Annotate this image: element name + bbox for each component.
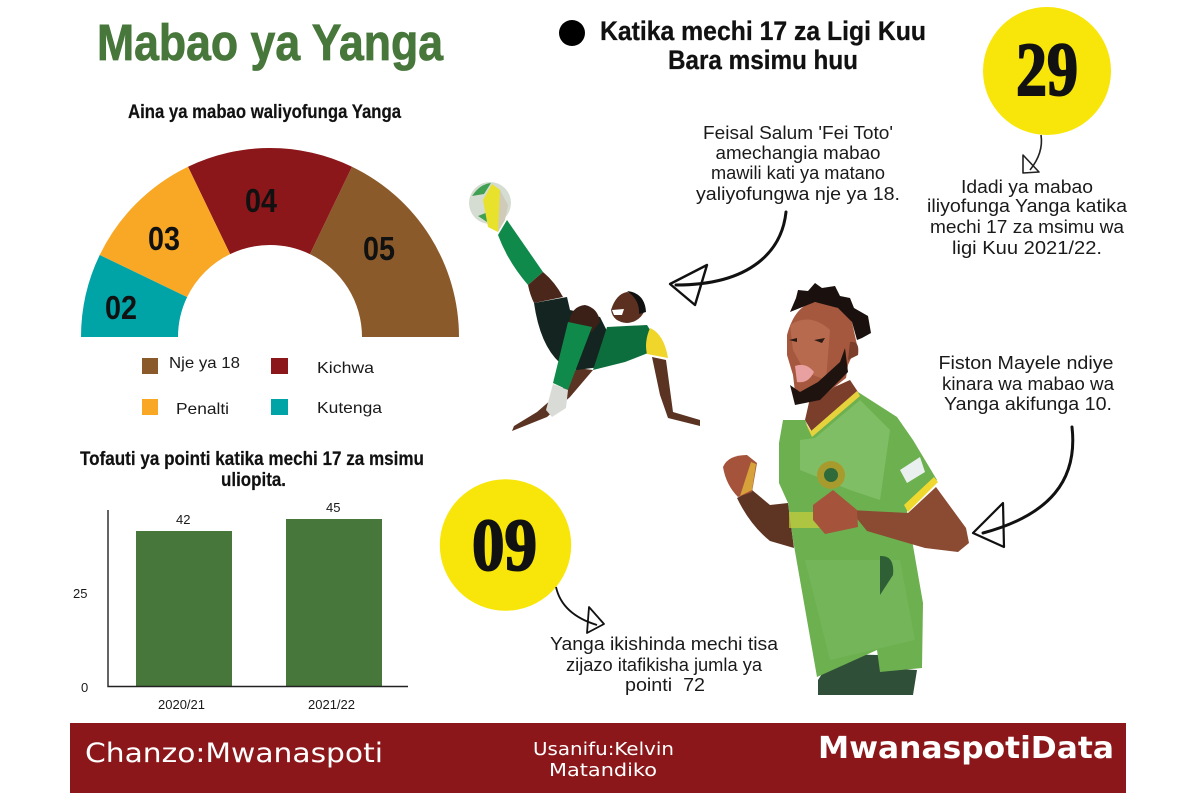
segment: Penalti (03) xyxy=(100,167,230,297)
text: Fei Toto caption xyxy=(696,122,900,204)
left arm xyxy=(737,490,794,548)
footer: designer: Matandiko xyxy=(549,760,657,781)
right fist xyxy=(813,490,858,534)
head xyxy=(611,292,645,323)
footer: source: Chanzo:Mwanaspoti xyxy=(85,738,383,769)
legend xyxy=(142,355,382,418)
text: 09 caption: pointi 72 xyxy=(625,674,705,695)
head xyxy=(787,302,857,400)
bar chart: 2020/21 xyxy=(158,697,205,712)
text: Fei Toto caption: yaliyofungwa nje ya 18. xyxy=(696,183,900,204)
headline with bullet xyxy=(559,16,926,75)
bar chart heading: Tofauti ya pointi katika mechi 17 za msimu xyxy=(80,449,424,470)
stat circle: 29 xyxy=(983,7,1111,135)
text: Fei Toto caption: amechangia mabao xyxy=(716,142,880,163)
footer: designer: Usanifu:Kelvin xyxy=(533,739,674,760)
text: 29 caption: ligi Kuu 2021/22. xyxy=(952,237,1102,258)
title: Mabao ya Yanga xyxy=(97,14,444,71)
hair xyxy=(790,283,871,340)
text: Fei Toto caption: mawili kati ya matano xyxy=(711,162,885,183)
jersey collar xyxy=(805,391,860,437)
sponsor text mark xyxy=(789,512,825,528)
jersey xyxy=(593,325,667,370)
lower arm left xyxy=(512,368,593,431)
semi-donut chart: 05 xyxy=(363,230,395,267)
bar chart: 25 xyxy=(73,586,87,601)
yellow sleeve xyxy=(646,328,668,358)
text: Mayele caption: kinara wa mabao wa xyxy=(942,373,1115,394)
bar chart: 42 xyxy=(176,512,190,527)
footer: brand: MwanaspotiData xyxy=(818,731,1114,766)
pie chart heading: Aina ya mabao waliyofunga Yanga xyxy=(128,102,401,123)
arrow: from 29 to caption xyxy=(1023,135,1041,173)
footer: designer xyxy=(533,739,674,781)
stat circle: 29: 29 xyxy=(1016,28,1078,112)
text: 29 caption: iliyofunga Yanga katika xyxy=(927,195,1128,216)
text: 29 caption: Idadi ya mabao xyxy=(961,176,1093,197)
bar chart: 2021/22 xyxy=(308,697,355,712)
headline with bullet: Bara msimu huu xyxy=(668,45,858,75)
bar chart: 0 xyxy=(81,680,88,695)
headline with bullet: Katika mechi 17 za Ligi Kuu xyxy=(600,16,926,46)
shorts xyxy=(534,297,613,370)
boot low xyxy=(546,384,568,417)
arrow: from 09 to caption xyxy=(556,587,604,633)
arrow: to Mayele xyxy=(973,427,1073,547)
bar chart xyxy=(73,500,408,712)
stat circle: 09: 09 xyxy=(472,505,537,587)
badge xyxy=(817,461,845,489)
mouth xyxy=(795,365,814,382)
bar chart: 45 xyxy=(326,500,340,515)
text: 09 caption: Yanga ikishinda mechi tisa xyxy=(550,633,779,654)
text: 29 caption: mechi 17 za msimu wa xyxy=(930,216,1125,237)
right arm xyxy=(652,357,700,426)
segment: Nje ya 18 (05) xyxy=(310,167,459,337)
knee and thigh xyxy=(569,305,600,332)
left fist xyxy=(723,455,757,497)
text: Mayele caption xyxy=(938,352,1115,414)
semi-donut chart: 03 xyxy=(148,220,180,257)
text: 09 caption: zijazo itafikisha jumla ya xyxy=(566,654,763,675)
ball xyxy=(469,182,511,224)
stat circle: 09 xyxy=(440,479,571,611)
text: Mayele caption: Fiston Mayele ndiye xyxy=(938,352,1114,373)
sleeve patch xyxy=(900,457,925,483)
bar chart heading xyxy=(80,449,424,491)
legend: Penalti xyxy=(176,401,229,418)
text: Mayele caption: Yanga akifunga 10. xyxy=(944,393,1112,414)
legend: Kichwa xyxy=(317,360,374,377)
jersey xyxy=(779,392,937,677)
right arm xyxy=(850,487,969,552)
boot xyxy=(483,184,505,232)
shorts xyxy=(818,654,917,695)
text: Fei Toto caption: Feisal Salum 'Fei Toto' xyxy=(703,122,893,143)
beard xyxy=(790,348,848,405)
semi-donut chart xyxy=(81,148,459,337)
footer band xyxy=(70,723,1126,793)
player: bicycle kick xyxy=(469,182,700,431)
player: Fiston Mayele xyxy=(723,283,969,695)
legend: Kutenga xyxy=(317,400,382,417)
semi-donut chart: 04 xyxy=(245,182,278,219)
raised leg sock xyxy=(498,220,543,285)
sleeve trim xyxy=(904,477,938,512)
legend: Nje ya 18 xyxy=(169,355,240,372)
thigh xyxy=(528,272,563,303)
segment: Kutenga (02) xyxy=(81,255,187,337)
text: 09 caption xyxy=(550,633,779,695)
segment: Kichwa (04) xyxy=(188,148,352,254)
text: 29 caption xyxy=(927,176,1128,258)
neck xyxy=(805,380,858,432)
semi-donut chart: 02 xyxy=(105,289,137,326)
bar chart heading: uliopita. xyxy=(221,470,286,491)
eyes xyxy=(789,338,825,343)
lower sock xyxy=(553,322,592,390)
ear xyxy=(848,342,858,360)
arrow: to Fei Toto xyxy=(670,212,786,305)
